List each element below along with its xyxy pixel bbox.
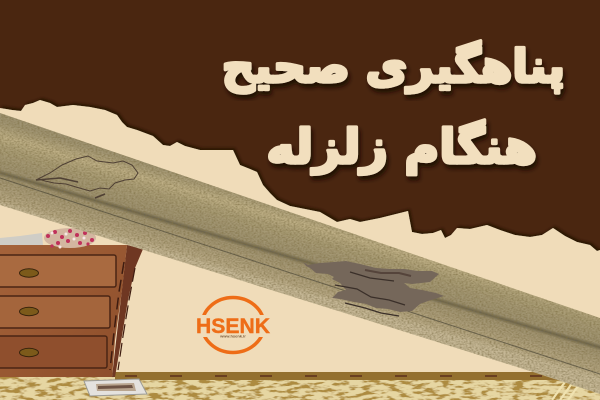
torn wall edge revealing the beige wall [0, 100, 600, 400]
HSENK logo: www.hsenk.ir [219, 334, 246, 338]
fallen picture frame [84, 379, 147, 396]
title line 1: پناهگیری صحیح [222, 40, 565, 93]
drawer 1 [0, 255, 116, 287]
crack on the beam, left [36, 156, 138, 198]
cloth on the dresser [0, 233, 43, 245]
fallen concrete beam [0, 113, 600, 394]
rug on the floor [0, 372, 600, 400]
HSENK logo [195, 298, 271, 352]
title line 2: هنگام زلزله [266, 119, 537, 175]
crack on the beam, right [303, 261, 444, 316]
drawer 2 [0, 296, 110, 328]
flowers on the dresser [44, 228, 96, 248]
drawer 3 [0, 336, 107, 368]
HSENK logo: HSENK [196, 315, 270, 338]
beam dark groove [0, 178, 600, 374]
dresser [0, 245, 143, 377]
